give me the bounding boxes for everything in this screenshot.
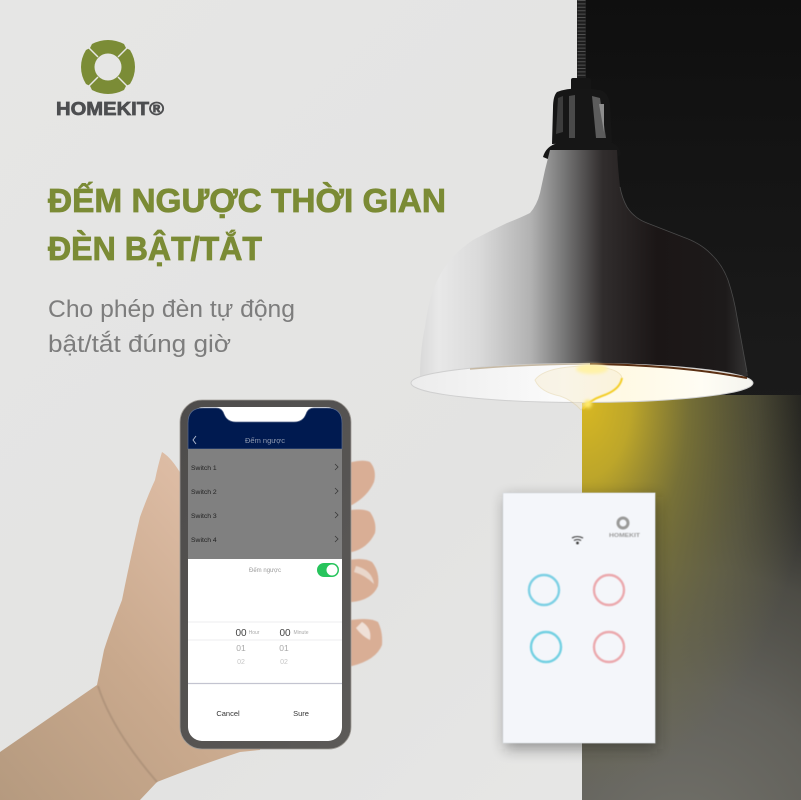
lamp socket (543, 78, 621, 162)
timer panel: Đếm ngược (249, 568, 281, 574)
subtitle text: Cho phép đèn tự động (48, 296, 295, 323)
time picker: 01 (236, 643, 246, 653)
lamp shade right edge (620, 187, 747, 372)
cancel and sure buttons: Sure (293, 709, 309, 718)
icon: wifi (572, 536, 583, 544)
time picker: 00 (279, 628, 291, 639)
title: ĐÈN BẬT/TẮT (48, 230, 262, 267)
time picker: 02 (280, 659, 288, 666)
time picker: Minute (293, 630, 309, 636)
time picker: 02 (237, 659, 245, 666)
cancel and sure buttons (216, 709, 309, 718)
switch logo: HOMEKIT (609, 533, 641, 539)
light bulb (535, 364, 622, 410)
phone screen (188, 407, 342, 741)
title: ĐẾM NGƯỢC THỜI GIAN (48, 182, 446, 219)
timer panel (188, 559, 342, 741)
switch list: Switch 2 (191, 489, 217, 496)
touch buttons (529, 575, 624, 662)
lamp cord (577, 0, 586, 82)
app header (188, 408, 342, 449)
icon: logo emblem (81, 40, 135, 94)
time picker: 00 (235, 628, 247, 639)
title (48, 182, 446, 267)
phone body (180, 400, 351, 749)
switch list: Switch 1 (191, 465, 217, 472)
hand and wrist (0, 452, 300, 800)
subtitle text: bật/tắt đúng giờ (48, 331, 231, 358)
lamp rim opening (411, 364, 753, 402)
wall switch (503, 493, 657, 749)
cancel and sure buttons: Cancel (216, 709, 240, 718)
background: dark wall with yellow light (582, 0, 801, 800)
switch plate (503, 493, 655, 743)
switch list: Switch 3 (191, 513, 217, 520)
fingers (340, 461, 382, 666)
subtitle text (48, 296, 295, 358)
logo: Homekit (56, 40, 164, 119)
lamp (411, 0, 753, 410)
hand holding phone (0, 452, 382, 800)
time picker: 01 (279, 643, 289, 653)
app header: Đếm ngược (245, 436, 285, 445)
switch list: Switch 4 (191, 537, 217, 544)
toggle (317, 563, 339, 577)
time picker: Hour (249, 630, 260, 636)
switch logo (609, 518, 641, 539)
brand name: HOMEKIT® (56, 99, 164, 119)
time picker (235, 628, 309, 666)
phone (180, 400, 351, 749)
switch list (188, 449, 342, 559)
lamp shade (420, 150, 748, 376)
